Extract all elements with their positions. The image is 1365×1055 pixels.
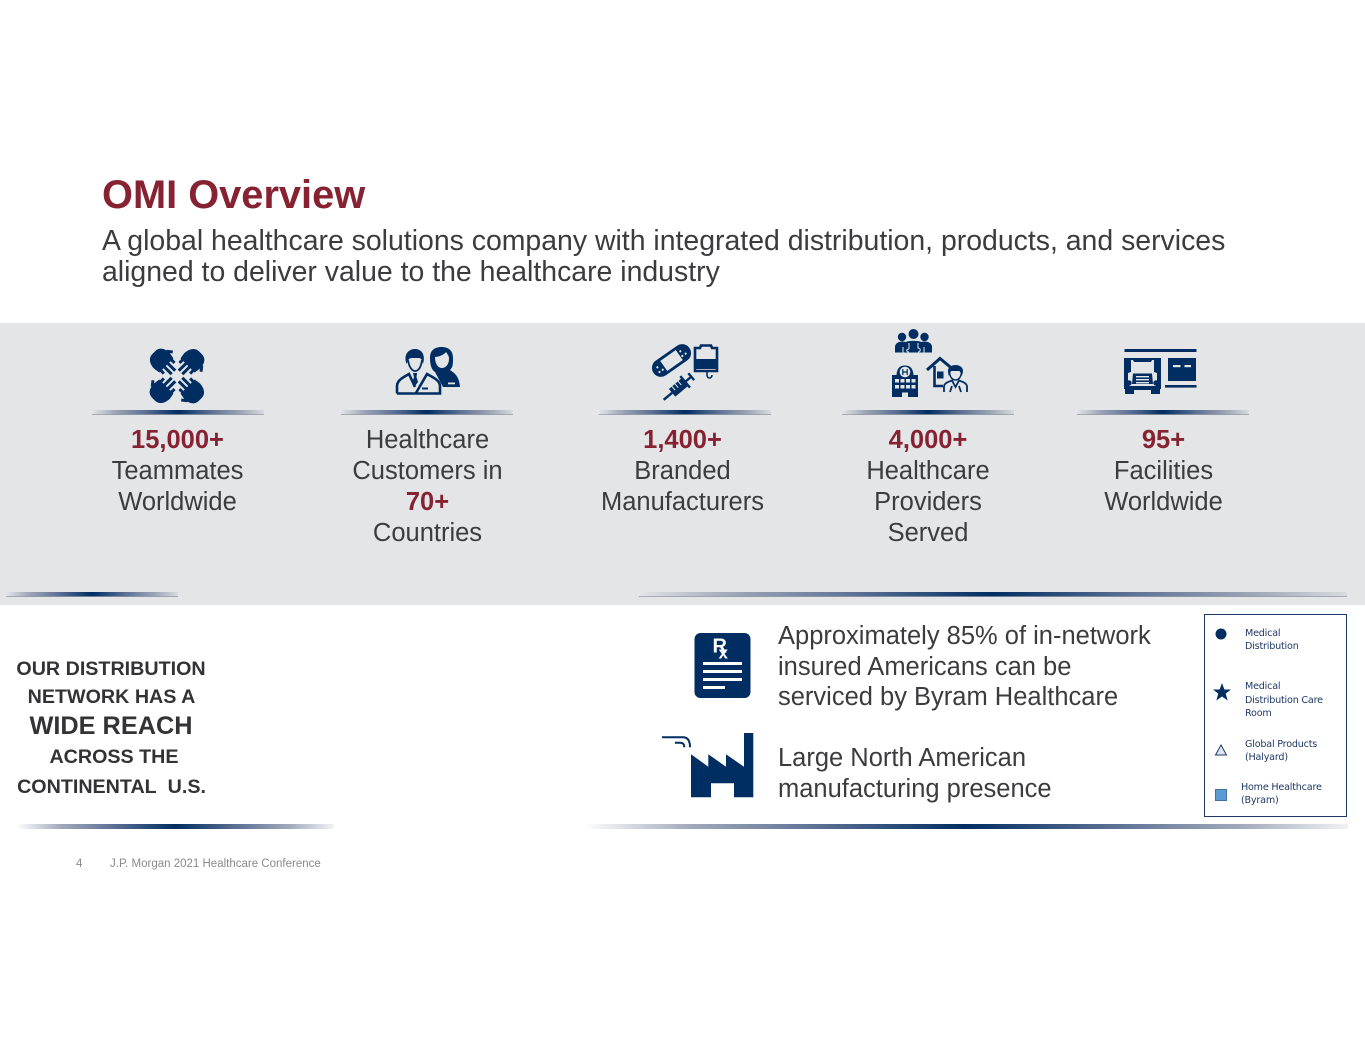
subtitle: aligned to deliver value to the healthcare industry <box>102 256 720 288</box>
stat: manufacturers: Branded <box>634 457 731 485</box>
legend label: global products: (Halyard) <box>1245 752 1288 763</box>
legend label: home healthcare: Home Healthcare <box>1241 782 1322 792</box>
distribution network callout <box>16 658 206 798</box>
distribution network callout: WIDE REACH <box>29 712 193 740</box>
prescription text <box>778 622 1151 711</box>
stat: facilities: Worldwide <box>1104 488 1223 516</box>
icon: joined hands <box>150 348 204 404</box>
stat: customers: Healthcare <box>366 426 489 454</box>
manufacturing text <box>778 744 1052 803</box>
distribution network callout: ACROSS THE <box>49 746 179 768</box>
legend label: care room: Distribution Care <box>1245 695 1323 706</box>
stat: providers: Served <box>888 519 968 547</box>
stat: providers: Providers <box>874 488 982 516</box>
stat: customers <box>352 426 503 547</box>
icon: truck at warehouse dock <box>1124 349 1196 394</box>
divider bar 1 <box>92 410 264 415</box>
icon: prescription: x <box>718 644 728 662</box>
legend marker: circle <box>1216 628 1226 640</box>
stat: teammates: Teammates <box>112 457 243 485</box>
stat: customers: Countries <box>373 519 482 547</box>
subtitle <box>102 225 1225 288</box>
band bottom bar left <box>6 592 178 597</box>
legend label: medical distribution: Distribution <box>1245 641 1299 652</box>
subtitle: A global healthcare solutions company with integrated distribution, products, and services <box>102 225 1225 257</box>
divider bar 4 <box>842 410 1014 415</box>
icon: bandage, IV bag and syringe <box>652 344 718 401</box>
stat: manufacturers <box>601 426 764 516</box>
legend label: medical distribution: Medical <box>1245 628 1280 638</box>
icon: doctors <box>396 347 460 395</box>
stat: teammates: 15,000+ <box>131 426 224 454</box>
legend marker: star <box>1213 683 1231 700</box>
panel: key statistics band <box>0 323 1365 605</box>
distribution network callout: NETWORK HAS A <box>28 686 195 708</box>
stat: manufacturers: Manufacturers <box>601 488 764 516</box>
legend label: care room: Room <box>1245 708 1272 719</box>
stat: customers: Customers in <box>352 457 503 485</box>
legend marker: triangle <box>1214 744 1228 756</box>
stat: providers: 4,000+ <box>889 426 967 454</box>
prescription text: Approximately 85% of in-network <box>778 622 1151 650</box>
stat: facilities <box>1104 426 1223 516</box>
stat: providers <box>866 426 990 547</box>
bottom bar left <box>16 824 334 829</box>
legend marker: square <box>1215 789 1227 801</box>
stat: facilities: 95+ <box>1142 426 1185 454</box>
legend label: global products: Global Products <box>1245 738 1317 750</box>
stat: manufacturers: 1,400+ <box>643 426 722 454</box>
footer: J.P. Morgan 2021 Healthcare Conference <box>110 858 321 870</box>
prescription text: insured Americans can be <box>778 653 1071 681</box>
stat: teammates <box>112 426 243 516</box>
page number: 4 <box>76 858 82 870</box>
legend <box>1204 614 1347 817</box>
stat: customers: 70+ <box>406 488 449 516</box>
legend label: global products <box>1245 738 1317 763</box>
icon: prescription: R <box>712 636 728 658</box>
legend label: care room <box>1245 681 1323 719</box>
manufacturing text: manufacturing presence <box>778 775 1052 803</box>
icon: providers, hospital and home care <box>892 329 968 397</box>
divider bar 3 <box>599 410 771 415</box>
stat: providers: Healthcare <box>866 457 990 485</box>
stat: teammates: Worldwide <box>118 488 237 516</box>
legend label: home healthcare <box>1241 782 1322 806</box>
icon: factory <box>662 733 754 798</box>
bottom bar right <box>583 824 1348 829</box>
stat: facilities: Facilities <box>1114 457 1213 485</box>
prescription text: serviced by Byram Healthcare <box>778 683 1118 711</box>
legend label: care room: Medical <box>1245 681 1280 692</box>
title: OMI Overview <box>102 173 365 217</box>
legend label: home healthcare: (Byram) <box>1241 795 1279 806</box>
distribution network callout: CONTINENTAL U.S. <box>17 776 206 798</box>
manufacturing text: Large North American <box>778 744 1026 772</box>
divider bar 5 <box>1077 410 1249 415</box>
distribution network callout: OUR DISTRIBUTION <box>16 658 206 680</box>
divider bar 2 <box>341 410 513 415</box>
icon: prescription <box>694 633 750 698</box>
band bottom bar right <box>639 592 1347 597</box>
legend label: medical distribution <box>1245 628 1299 652</box>
